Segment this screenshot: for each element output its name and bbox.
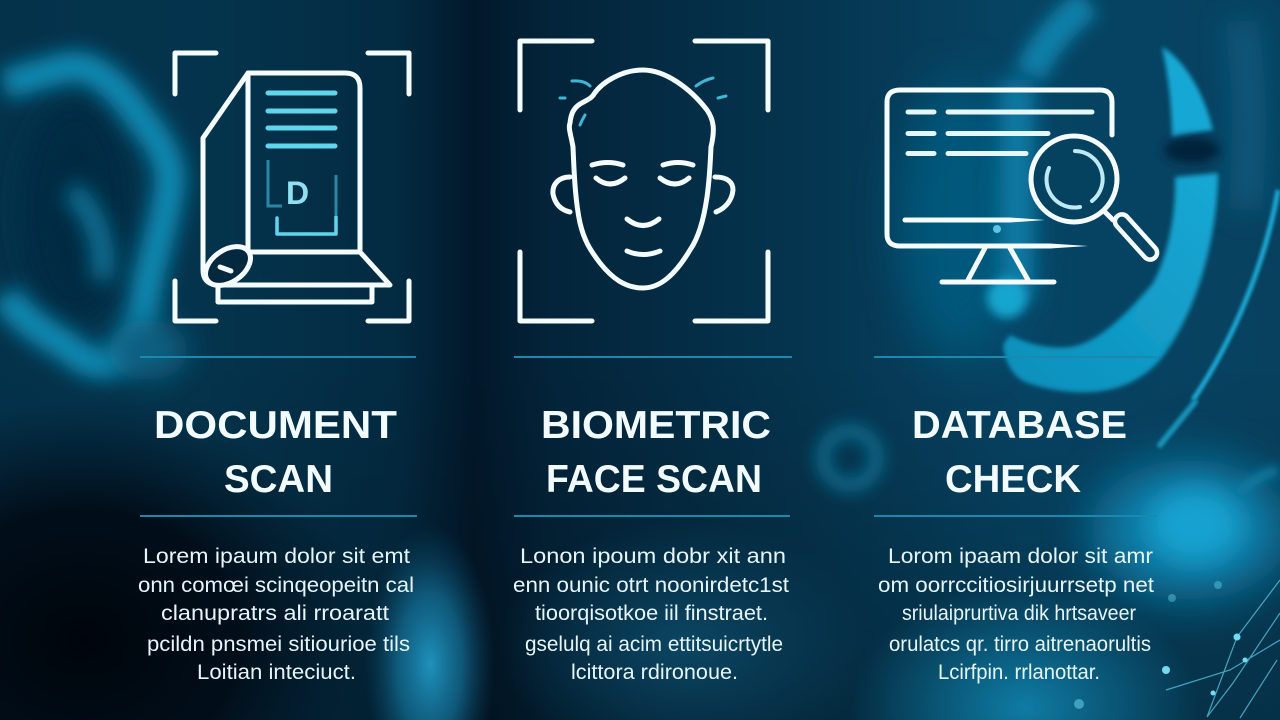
body text: Lcirfpin. rrlanottar.: [938, 661, 1100, 684]
body text: gselulq ai acim ettitsuicrtytle: [525, 633, 783, 656]
body text: pcildn pnsmei sitiourioe tils: [147, 633, 410, 656]
body text: tioorqisotkoe iil finstraet.: [535, 602, 768, 625]
body text: Lorom ipaam dolor sit amr: [888, 545, 1153, 568]
icon letter: D: [286, 175, 309, 211]
heading: SCAN: [224, 458, 333, 501]
body text: onn comœi scinqeopeitn cal: [138, 574, 414, 597]
divider: [514, 356, 792, 358]
body text: orulatcs qr. tirro aitrenaorultis: [889, 633, 1151, 656]
heading: BIOMETRIC: [541, 404, 771, 447]
heading: CHECK: [945, 458, 1081, 501]
divider: [874, 356, 1157, 358]
heading: DOCUMENT: [154, 404, 397, 447]
panel: document scan: [138, 53, 417, 684]
panel: biometric face scan: [513, 41, 792, 684]
body text: Loitian inteciuct.: [197, 661, 356, 684]
body text: Lorem ipaum dolor sit emt: [143, 545, 410, 568]
icon: document on scanner: [175, 53, 409, 321]
body text: lcittora rdironoue.: [571, 661, 738, 684]
divider: [140, 356, 416, 358]
body text: enn ounic otrt noonirdetc1st: [513, 574, 789, 597]
icon: monitor with magnifier: [887, 90, 1160, 282]
body text: sriulaiprurtiva dik hrtsaveer: [902, 602, 1136, 625]
icon: face in scan frame: [520, 41, 768, 321]
body text: clanupratrs ali rroaratt: [161, 602, 389, 625]
panel: database check: [874, 90, 1160, 684]
body text: om oorrccitiosirjuurrsetp net: [878, 574, 1154, 597]
heading: FACE SCAN: [546, 458, 762, 501]
heading: DATABASE: [912, 404, 1127, 447]
body text: Lonon ipoum dobr xit ann: [520, 545, 786, 568]
